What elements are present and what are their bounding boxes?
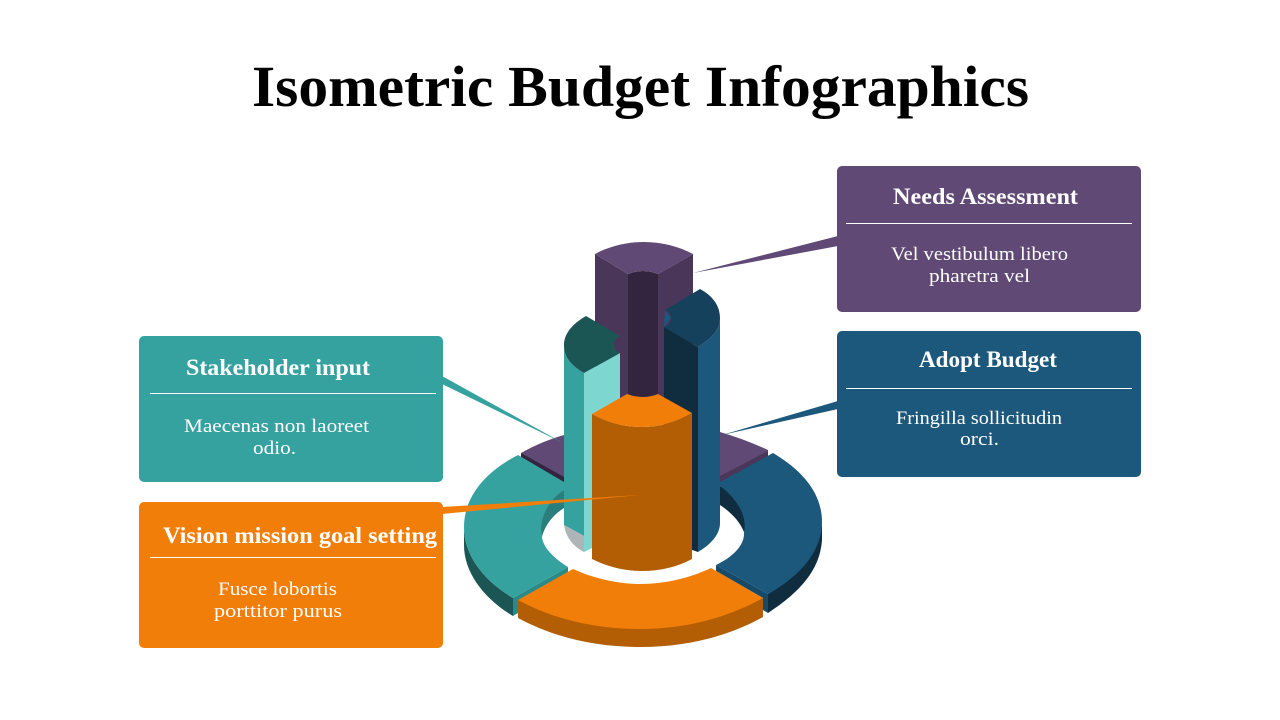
panel: vision mission goal setting: Fusce lobortis <box>218 579 337 600</box>
column: orange <box>592 394 692 571</box>
panel: needs assessment <box>837 166 1141 312</box>
panel: adopt budget: Fringilla sollicitudin <box>896 408 1063 429</box>
panel: needs assessment: Vel vestibulum libero <box>891 244 1068 265</box>
panel: vision mission goal setting: Vision mission goal setting <box>163 523 438 548</box>
panel: stakeholder input <box>139 336 443 482</box>
column: purple <box>595 242 693 420</box>
panel: needs assessment: Needs Assessment <box>893 184 1078 209</box>
panel: needs assessment: pharetra vel <box>929 266 1030 287</box>
panel: vision mission goal setting <box>139 502 443 648</box>
panel: adopt budget: Adopt Budget <box>919 347 1057 372</box>
pointer: adopt budget <box>722 401 838 435</box>
ring segment: blue <box>716 453 822 613</box>
panel: adopt budget: orci. <box>960 429 999 450</box>
ring segment: orange <box>518 568 763 647</box>
isometric ring chart <box>464 432 822 647</box>
title: Isometric Budget Infographics <box>252 54 1029 119</box>
panel: stakeholder input: Stakeholder input <box>186 355 370 380</box>
pointer: stakeholder input <box>442 376 563 443</box>
panel: stakeholder input: odio. <box>253 438 296 459</box>
pointer: vision mission goal setting <box>442 495 640 514</box>
column: teal <box>564 316 620 552</box>
panel: vision mission goal setting: porttitor purus <box>214 601 342 622</box>
panel: stakeholder input: Maecenas non laoreet <box>184 416 370 437</box>
ring segment: teal <box>464 455 568 616</box>
pointer: needs assessment <box>693 236 838 273</box>
ring segment: purple back <box>521 432 768 483</box>
panel: adopt budget <box>837 331 1141 477</box>
column: blue <box>664 289 720 552</box>
